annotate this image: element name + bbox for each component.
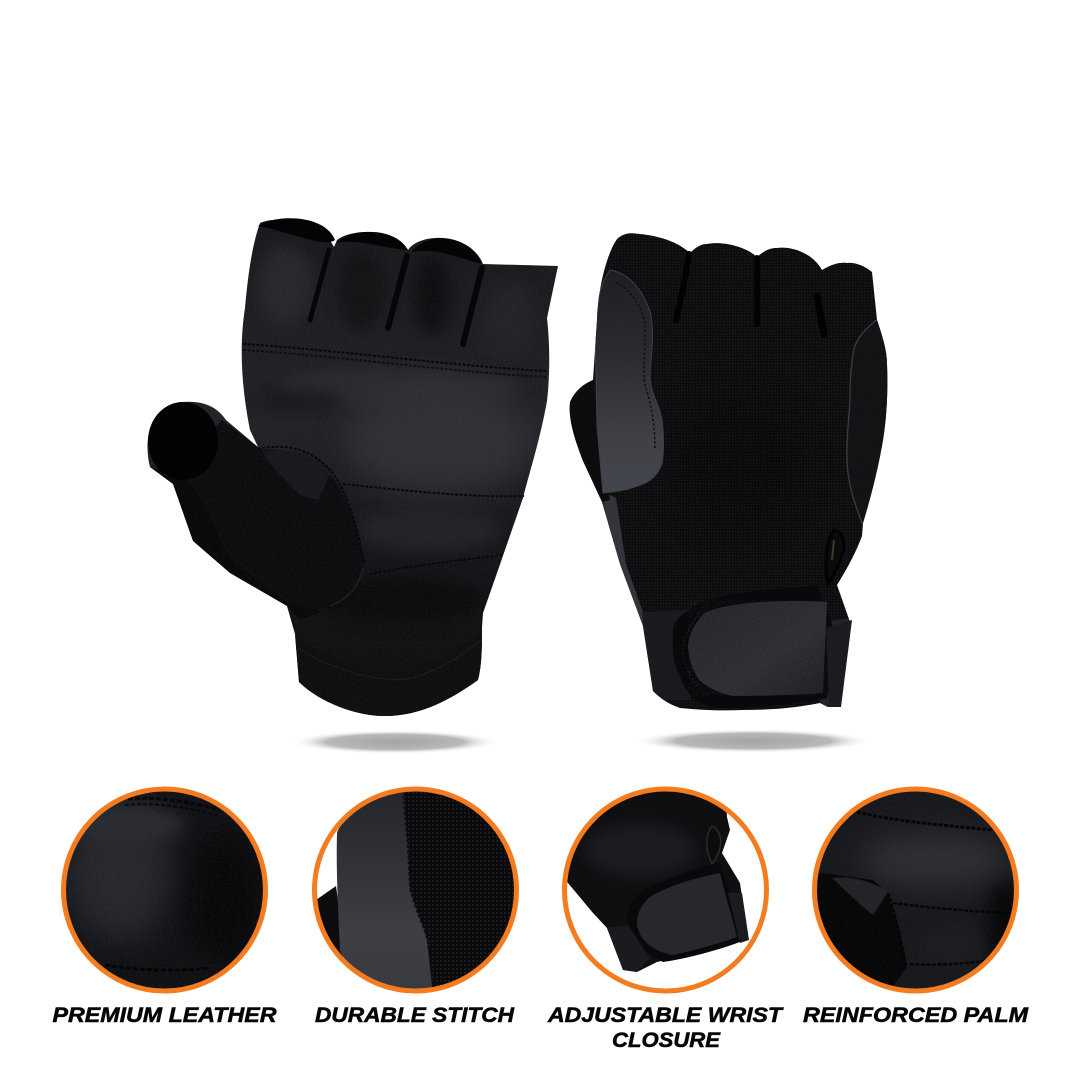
strap [653, 870, 740, 962]
finger slits [676, 254, 824, 334]
strap leather [637, 873, 737, 955]
orange ring [564, 789, 766, 991]
ground shadow: right glove [633, 729, 873, 753]
detail circle: durable stitch [310, 785, 530, 995]
dark wedge [317, 886, 342, 956]
side gray band [603, 494, 644, 631]
thumb web tab [262, 450, 332, 500]
fabric [567, 792, 742, 972]
leather side patch [595, 270, 664, 493]
label: adjustable wrist closure [547, 1004, 784, 1052]
palm stitching [243, 344, 546, 606]
strap leather panel [688, 601, 827, 696]
thumb fabric [570, 380, 610, 502]
velcro strap [673, 585, 838, 708]
detail circle: premium leather [60, 785, 270, 995]
label: adjustable wrist closure: ADJUSTABLE WRIST [547, 1004, 784, 1027]
leather band [337, 785, 433, 995]
cuff [607, 925, 650, 972]
detail circle: reinforced palm [810, 785, 1025, 995]
loop [707, 826, 721, 864]
label: premium leather: PREMIUM LEATHER [52, 1004, 277, 1027]
closure loop [826, 530, 844, 584]
strap end tab [826, 620, 852, 707]
label: adjustable wrist closure: CLOSURE [612, 1029, 721, 1052]
left glove: leather palm side [140, 210, 570, 725]
wrist cuff band [295, 633, 482, 716]
back fabric under thumb [150, 467, 320, 620]
thumb opening [148, 402, 218, 480]
leather tab [832, 878, 888, 915]
orange ring [314, 789, 516, 991]
orange ring [64, 789, 266, 991]
tab [728, 893, 749, 943]
label: reinforced palm: REINFORCED PALM [803, 1004, 1029, 1027]
orange ring [814, 789, 1016, 991]
right leather patch [846, 320, 888, 524]
thumb pad [192, 420, 363, 588]
detail circle: adjustable wrist closure [560, 785, 775, 995]
thumb pad [815, 872, 907, 995]
finger openings [258, 218, 482, 264]
right glove: fabric back side [560, 225, 895, 715]
label: durable stitch: DURABLE STITCH [315, 1004, 515, 1027]
ground shadow: left glove [290, 730, 500, 754]
finger gaps [310, 250, 482, 344]
wrist cuff [642, 610, 690, 700]
infographic canvas [52, 218, 1029, 1048]
fabric area [404, 792, 514, 988]
